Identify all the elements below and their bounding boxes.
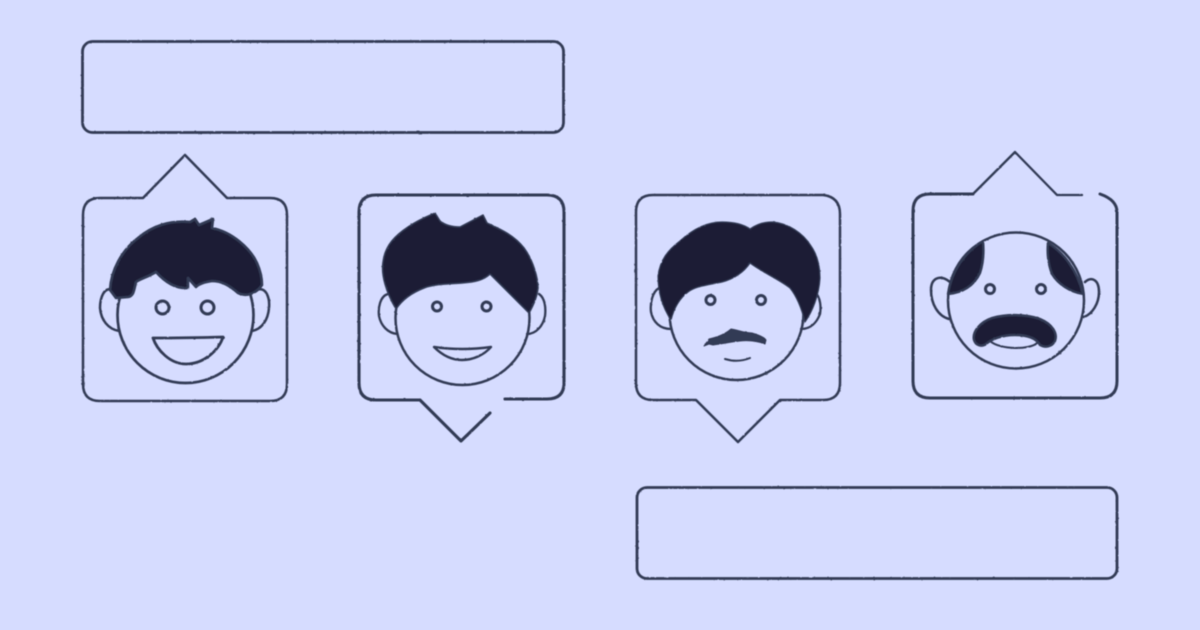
open smile [153,337,223,364]
panel: moustached man face [636,195,840,442]
speech frame with upward pointer [913,194,1117,398]
hair [110,219,262,298]
smile [434,347,491,360]
speech frame with downward pointer [636,195,840,442]
ears [931,278,1099,319]
thick moustache [974,315,1056,347]
panel: balding older man face [913,152,1117,398]
eyes [706,296,766,304]
panel: young man face [359,195,564,441]
moustache [704,329,766,346]
head [396,251,530,385]
hair [658,222,820,322]
panel: child face [83,155,287,401]
eyes [156,301,214,314]
ears [100,289,269,331]
mouth [725,358,750,361]
speech frame with downward pointer [359,195,564,441]
mouth [990,341,1037,348]
right hair patch [1048,243,1083,294]
roof pointer [973,152,1082,195]
head [670,246,804,380]
eyes [432,302,491,311]
speech frame with upward pointer [83,155,287,401]
ears [651,288,820,329]
empty label box: bottom [637,488,1117,578]
eyes [986,284,1046,294]
head [948,232,1084,368]
hair [383,213,538,313]
left hair patch [948,241,983,294]
ears [379,294,545,334]
head [118,247,254,383]
empty label box: top [82,42,564,132]
